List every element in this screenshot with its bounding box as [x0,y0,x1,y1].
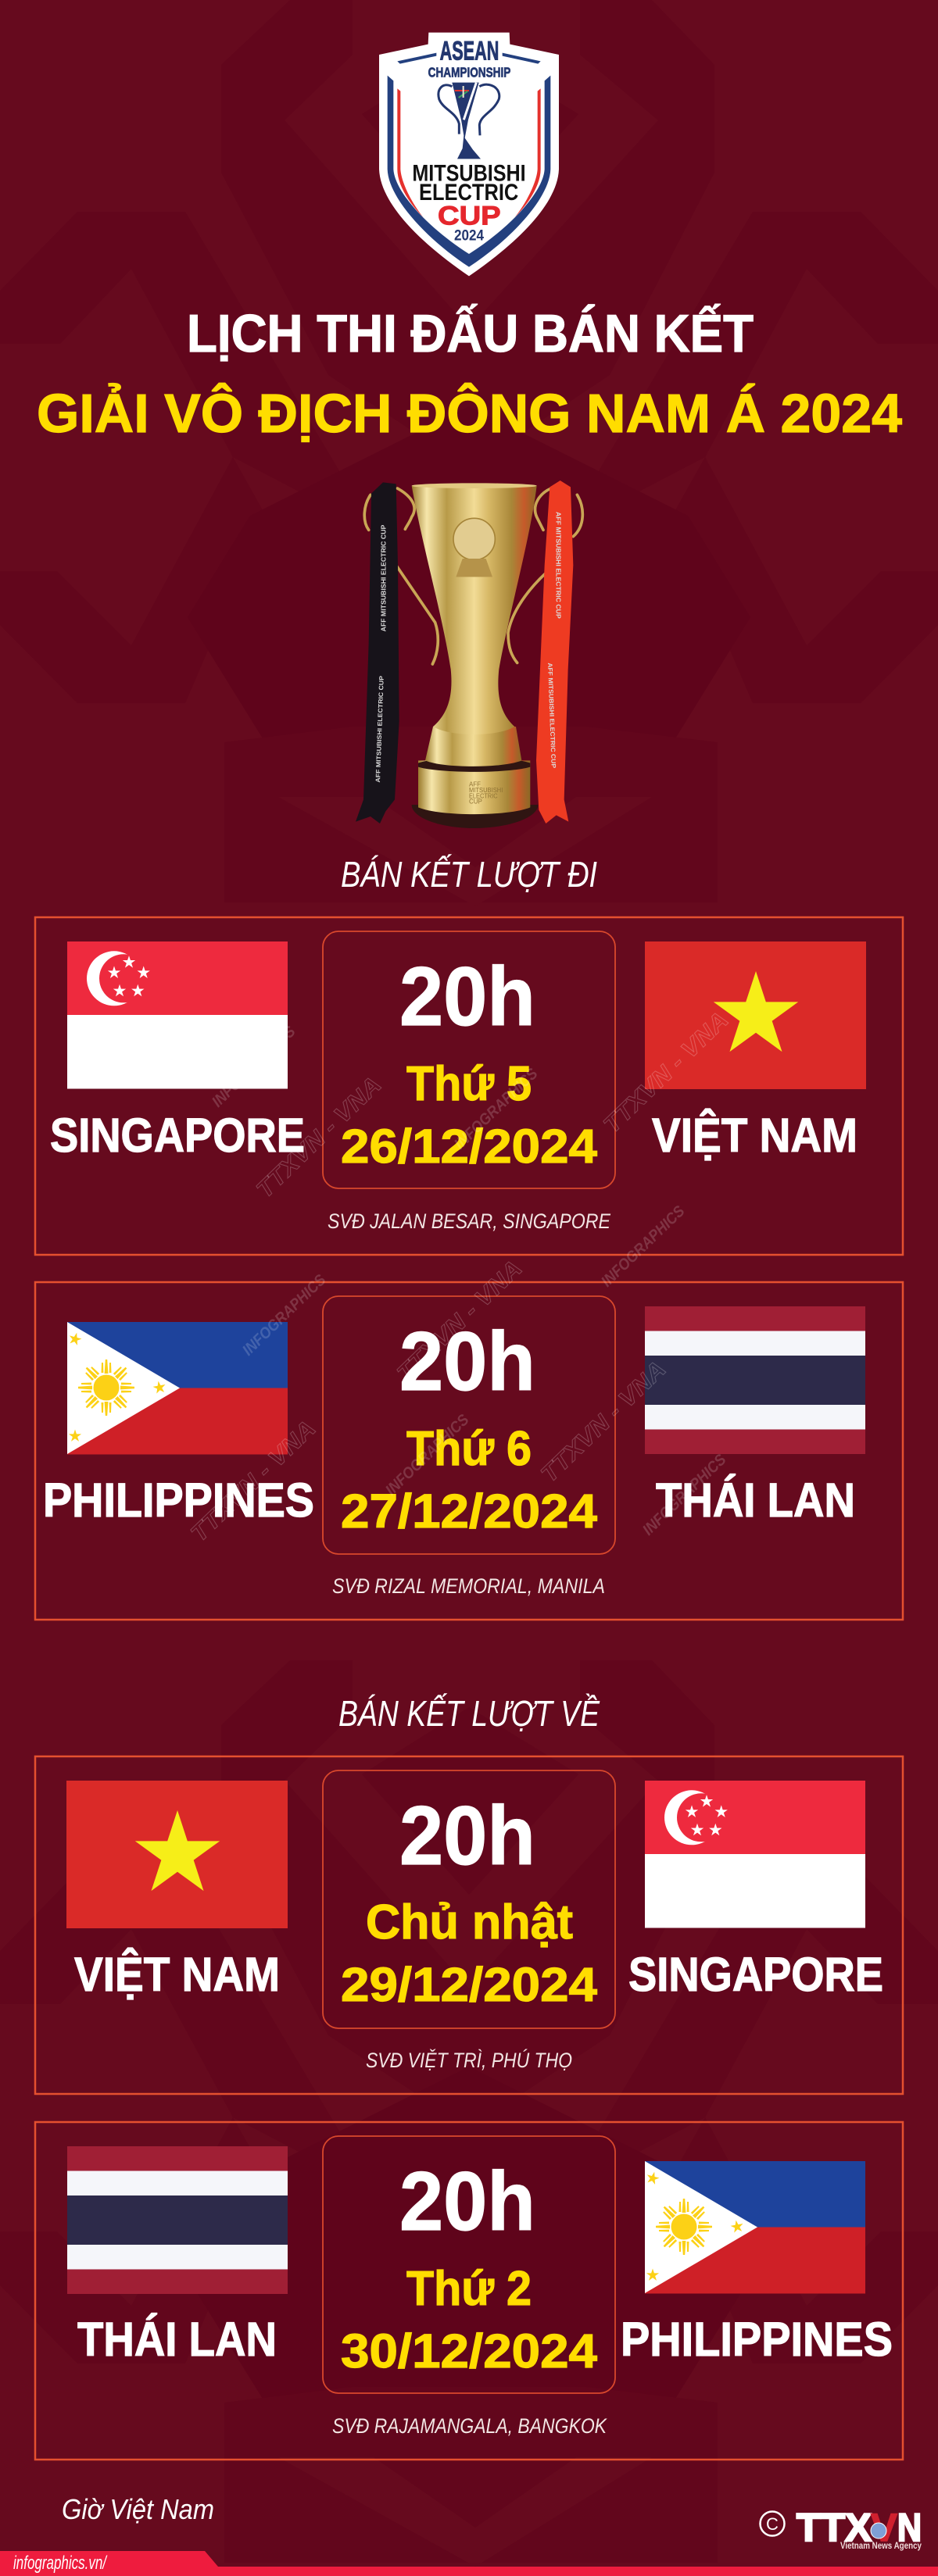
team name: Philippines: PHILIPPINES [621,2313,893,2366]
agency logo: TTXVN: V [871,2506,898,2549]
watermarks: TTXVN - VNA [599,1007,733,1138]
agency logo: TTXVN: C [766,2514,779,2534]
agency logo: TTXVN: Vietnam News Agency [840,2540,922,2551]
date: 30/12/2024 [341,2324,597,2378]
panel: Singapore vs Vietnam [35,917,903,1255]
flag: Singapore [645,1781,865,1928]
match info box [323,2136,615,2393]
logo: ASEAN Championship Mitsubishi Electric Cup 2024 [379,33,559,276]
watermarks: INFOGRAPHICS [209,1023,299,1111]
venue: SVĐ RIZAL MEMORIAL, MANILA [332,1574,605,1598]
flag: Vietnam [66,1781,288,1928]
trophy with ribbons: AFF MITSUBISHI ELECTRIC CUP [546,663,557,769]
team name: Thailand: THÁI LAN [77,2313,277,2366]
logo: ASEAN Championship Mitsubishi Electric Cup 2024: ELECTRIC [419,180,518,205]
watermarks: INFOGRAPHICS [451,1065,542,1153]
weekday: Thứ 2 [406,2262,532,2316]
agency logo: TTXVN [760,2506,922,2551]
logo: ASEAN Championship Mitsubishi Electric Cup 2024: CHAMPIONSHIP [428,64,510,80]
team name: Singapore: SINGAPORE [50,1109,305,1162]
watermarks: TTXVN - VNA [536,1356,671,1488]
watermarks: INFOGRAPHICS [382,1411,473,1499]
logo: ASEAN Championship Mitsubishi Electric Cup 2024: ASEAN [440,37,499,66]
logo: ASEAN Championship Mitsubishi Electric Cup 2024: MITSUBISHI [412,161,526,187]
team name: Vietnam: VIỆT NAM [652,1109,857,1162]
trophy with ribbons: AFF MITSUBISHI ELECTRIC CUP [381,524,388,631]
panel: Thailand vs Philippines [35,2122,903,2460]
kickoff time: 20h [399,949,535,1043]
timezone note: Giờ Việt Nam [62,2493,214,2525]
kickoff time: 20h [399,1314,535,1408]
trophy with ribbons: AFF MITSUBISHI ELECTRIC CUP [555,512,562,619]
team name: Philippines: PHILIPPINES [43,1474,314,1527]
flag: Philippines [67,1322,288,1455]
trophy with ribbons: ELECTRIC [469,792,498,799]
date: 27/12/2024 [341,1485,597,1538]
weekday: Chủ nhật [366,1895,573,1949]
team name: Thailand: THÁI LAN [656,1474,855,1527]
kickoff time: 20h [399,2154,535,2248]
weekday: Thứ 5 [406,1057,532,1111]
footer ribbon with site name: infographics.vn/ [13,2553,108,2574]
team name: Vietnam: VIỆT NAM [74,1948,280,2001]
watermarks [186,1007,733,1547]
panel: Philippines vs Thailand [35,1282,903,1620]
date: 29/12/2024 [341,1958,597,2011]
footer ribbon with site name [0,2551,938,2576]
watermarks: INFOGRAPHICS [639,1451,730,1539]
watermarks: TTXVN - VNA [186,1416,320,1547]
watermarks: INFOGRAPHICS [598,1202,689,1291]
match info box [323,1296,615,1554]
watermarks: TTXVN - VNA [252,1072,386,1203]
flag: Thailand [645,1306,865,1454]
panel: Vietnam vs Singapore [35,1756,903,2094]
title [37,303,902,444]
logo: ASEAN Championship Mitsubishi Electric Cup 2024: CUP [438,202,501,231]
flag: Vietnam [645,941,866,1089]
trophy with ribbons: AFF [469,781,481,788]
kickoff time: 20h [399,1788,535,1882]
flag: Thailand [67,2146,288,2294]
section label: first leg: BÁN KẾT LƯỢT ĐI [341,854,597,895]
flag: Philippines [645,2161,865,2294]
venue: SVĐ RAJAMANGALA, BANGKOK [332,2414,607,2438]
trophy with ribbons: CUP [469,799,482,806]
agency logo: TTXVN: TTX [797,2506,872,2549]
match info box [323,1770,615,2028]
trophy with ribbons: MITSUBISHI [469,787,503,794]
date: 26/12/2024 [341,1120,597,1173]
agency logo: TTXVN: N [897,2506,922,2549]
trophy with ribbons: AFF MITSUBISHI ELECTRIC CUP [374,675,385,783]
logo: ASEAN Championship Mitsubishi Electric Cup 2024: 2024 [454,227,484,244]
weekday: Thứ 6 [406,1422,532,1476]
watermarks: INFOGRAPHICS [239,1271,330,1359]
trophy with ribbons [356,481,582,828]
title line 1: LỊCH THI ĐẤU BÁN KẾT [187,303,754,363]
watermarks: TTXVN - VNA [392,1256,527,1387]
title line 2: GIẢI VÔ ĐỊCH ĐÔNG NAM Á 2024 [37,382,902,444]
flag: Singapore [67,941,288,1089]
match info box [323,931,615,1188]
section label: second leg: BÁN KẾT LƯỢT VỀ [338,1693,600,1734]
venue: SVĐ JALAN BESAR, SINGAPORE [328,1209,611,1233]
team name: Singapore: SINGAPORE [628,1948,883,2001]
venue: SVĐ VIỆT TRÌ, PHÚ THỌ [366,2048,572,2072]
